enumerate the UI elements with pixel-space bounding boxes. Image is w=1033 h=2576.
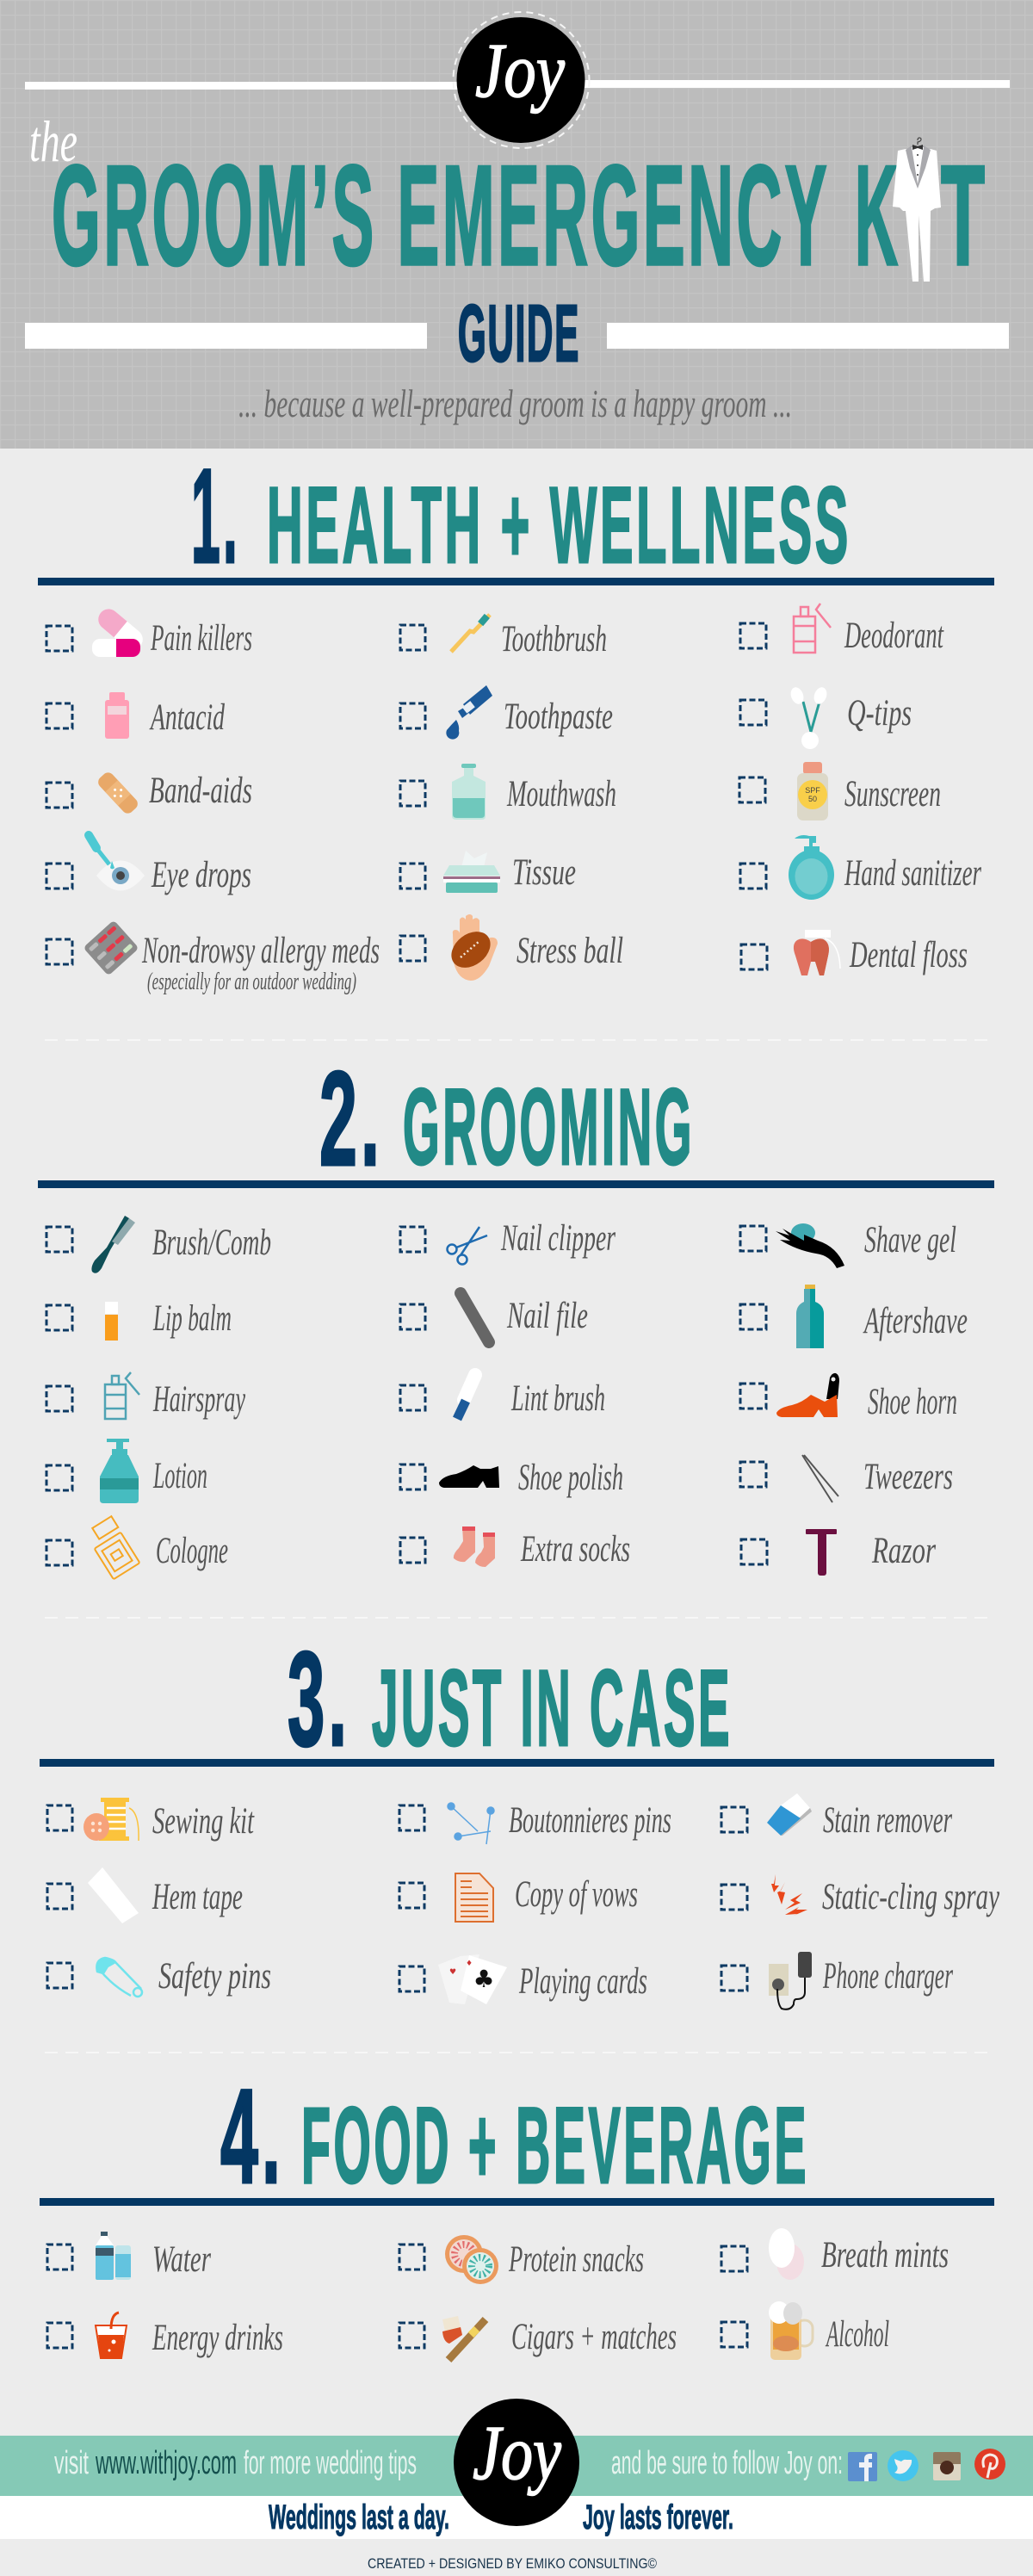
checkbox — [400, 936, 425, 961]
item: Cigars + matches — [399, 2316, 677, 2360]
icon: pins — [448, 1803, 494, 1844]
footer text: visit: visit — [54, 2445, 89, 2481]
item: Lip balm — [46, 1298, 232, 1341]
icon: twitter — [888, 2450, 919, 2481]
heading: Just in Case — [40, 1625, 994, 1774]
checkbox — [46, 1386, 72, 1411]
checkbox — [740, 864, 766, 889]
item: Breath mints — [721, 2228, 949, 2280]
label: Shave gel — [864, 1220, 956, 1260]
item: Toothbrush — [400, 614, 607, 659]
item: Hem tape — [47, 1867, 243, 1923]
dashed separator 2 — [45, 1617, 994, 1619]
tagline: Weddings last a day: Weddings last a day. — [269, 2499, 449, 2536]
icon: playing cards: ♣ — [473, 1965, 495, 1993]
checkbox — [721, 2322, 747, 2347]
checkbox — [740, 1384, 766, 1409]
icon: razor — [806, 1529, 837, 1576]
item: Pain killers — [46, 605, 252, 659]
icon: facebook — [848, 2452, 877, 2481]
dashed separator 1 — [45, 1039, 994, 1041]
icon: cologne bottle — [92, 1516, 139, 1579]
logo: Joy footer badge: Joy — [473, 2411, 561, 2496]
checkbox — [46, 626, 72, 651]
checkbox — [400, 1464, 425, 1489]
heading: Food + Beverage — [40, 2062, 994, 2212]
item: Razor — [741, 1529, 936, 1576]
item: Band-aids — [46, 770, 252, 816]
panel: 4. Food + Beverage — [40, 2062, 994, 2360]
icon: cotton swabs — [789, 685, 829, 749]
item: Extra socks — [400, 1526, 630, 1570]
item: Mouthwash — [400, 764, 616, 820]
icon: hem tape — [88, 1867, 139, 1923]
checkbox — [46, 864, 72, 889]
icon: pills — [92, 605, 147, 657]
checkbox — [46, 1305, 72, 1330]
checkbox — [741, 944, 767, 969]
item: Lint brush — [400, 1375, 605, 1419]
label: Safety pins — [158, 1956, 271, 1997]
label: Protein snacks — [508, 2239, 644, 2280]
checkbox — [400, 1385, 425, 1410]
heading: Food + Beverage: 4. — [220, 2062, 284, 2212]
checkbox — [46, 1227, 72, 1252]
label: Shoe polish — [518, 1458, 623, 1498]
dashed separator 3 — [45, 2052, 994, 2053]
icon: hand with football — [444, 914, 498, 981]
item: Shoe polish — [400, 1458, 623, 1498]
checkbox — [46, 1540, 72, 1565]
item: Stress ball — [400, 914, 623, 981]
checkbox — [46, 1465, 72, 1490]
icon: spool and button — [84, 1798, 139, 1841]
icon: mouthwash bottle — [452, 764, 486, 820]
icon: instagram — [933, 2452, 961, 2480]
item: Q-tips — [740, 685, 912, 749]
icon: lip balm — [105, 1302, 118, 1341]
icon: toothbrush — [451, 614, 490, 652]
checkbox — [740, 700, 766, 725]
item: Shave gel — [740, 1220, 956, 1268]
icon: water bottles — [96, 2232, 131, 2280]
checkbox — [46, 703, 72, 728]
label: Non-drowsy allergy meds — [141, 931, 380, 971]
item: Toothpaste — [400, 685, 613, 740]
heading: Just in Case: 3. — [288, 1625, 350, 1774]
item: Deodorant — [740, 604, 944, 656]
label: Deodorant — [844, 616, 944, 656]
label: Cigars + matches — [511, 2317, 677, 2357]
icon: comb — [91, 1216, 135, 1273]
panel: header — [0, 0, 1033, 449]
icon: eraser — [767, 1793, 812, 1836]
label: Hairspray — [152, 1379, 246, 1420]
icon: pump bottle — [789, 835, 834, 900]
label: Breath mints — [821, 2235, 949, 2276]
checkbox — [740, 1462, 766, 1487]
icon: black shoe — [439, 1465, 499, 1488]
label: Dental floss — [849, 935, 968, 975]
item: Playing cards — [399, 1954, 647, 2004]
checkbox — [740, 1304, 766, 1329]
icon: sunscreen bottle — [797, 762, 828, 820]
checkbox — [399, 2323, 424, 2348]
icon: playing cards — [438, 1954, 507, 2004]
label: Copy of vows — [515, 1874, 638, 1915]
icon: lotion bottle — [100, 1439, 139, 1503]
footer text: visit — [54, 2445, 417, 2481]
footer text: follow: and be sure to follow Joy on: — [611, 2445, 843, 2481]
checkbox — [46, 783, 72, 808]
checkbox — [400, 625, 425, 650]
checkbox — [46, 939, 72, 964]
checkbox — [721, 1966, 747, 1991]
tagline: Joy lasts forever: Joy lasts forever. — [583, 2499, 733, 2536]
title: Groom's Emergency Kit: T — [941, 136, 985, 294]
icon: nail file — [461, 1293, 489, 1342]
label: Shoe horn — [868, 1382, 957, 1422]
item: Safety pins — [47, 1956, 271, 1997]
icon: shoe and horn — [776, 1373, 839, 1417]
item: Lotion — [46, 1439, 207, 1503]
label: Band-aids — [149, 771, 252, 811]
icon: tissue box — [443, 851, 500, 893]
checkbox — [721, 1807, 747, 1832]
label: Pain killers — [150, 618, 252, 659]
item: Antacid — [46, 692, 225, 739]
label: Nail file — [506, 1296, 588, 1336]
label: Lip balm — [152, 1298, 232, 1339]
icon: scissors — [448, 1227, 487, 1264]
item: Phone charger — [721, 1952, 953, 2009]
icon: sunscreen bottle: 50 — [808, 795, 817, 803]
icon: beer mug — [769, 2301, 813, 2360]
label: Tissue — [512, 852, 576, 893]
item: Copy of vows — [399, 1873, 638, 1922]
panel: 3. Just in Case — [40, 1625, 1000, 2009]
icon: blister pack — [83, 920, 139, 975]
checkbox — [400, 1227, 425, 1252]
item: Hairspray — [46, 1372, 246, 1420]
checkbox — [399, 1805, 424, 1830]
item: Tissue — [400, 851, 576, 893]
item: Stain remover — [721, 1793, 952, 1841]
label: Extra socks — [520, 1529, 630, 1570]
item: Energy drinks — [47, 2313, 283, 2358]
icon: pinterest — [974, 2449, 1005, 2480]
checkbox — [400, 703, 425, 728]
icon: socks — [454, 1526, 495, 1567]
checkbox — [47, 1963, 72, 1988]
subtitle: Guide with white bars: GUIDE — [458, 288, 580, 378]
heading: Health + Wellness: 1. — [191, 442, 240, 591]
icon: document — [455, 1873, 493, 1922]
icon: deodorant spray — [794, 604, 831, 653]
label: Alcohol — [825, 2314, 889, 2355]
icon: aftershave bottle — [796, 1285, 824, 1348]
item: Dental floss — [741, 930, 968, 975]
label: Water — [152, 2239, 211, 2280]
label note: (especially for an outdoor wedding) — [147, 968, 356, 995]
item: Boutonnieres pins — [399, 1800, 671, 1844]
label: Toothpaste — [504, 697, 613, 737]
checkbox — [740, 623, 766, 648]
credit: CREATED + DESIGNED BY EMIKO CONSULTING© — [368, 2555, 657, 2572]
logo: Joy badge: Joy — [475, 28, 565, 114]
heading: Grooming: 2. — [319, 1044, 383, 1194]
checkbox — [399, 1966, 424, 1991]
checkbox — [399, 1883, 424, 1908]
icon: playing cards: ♦ — [466, 1960, 473, 1968]
checkbox — [47, 1805, 72, 1830]
label: Boutonnieres pins — [509, 1800, 671, 1841]
checkbox — [739, 777, 765, 802]
item: Shoe horn — [740, 1373, 957, 1422]
icon: hand with gel — [776, 1223, 844, 1268]
panel: footer — [0, 2399, 1033, 2572]
label: Sewing kit — [152, 1801, 255, 1842]
title: the: the — [29, 108, 77, 174]
heading: Grooming — [38, 1044, 994, 1194]
icon: playing cards: ♥ — [449, 1968, 456, 1977]
item: Sunscreen — [739, 762, 941, 820]
item: Sewing kit — [47, 1798, 255, 1842]
item: Protein snacks — [399, 2235, 644, 2284]
checkbox — [47, 2323, 72, 2348]
label: Nail clipper — [500, 1218, 615, 1259]
icon: bottle — [105, 692, 129, 739]
icon: mints — [769, 2228, 804, 2280]
icon: cigar and matches — [442, 2316, 486, 2360]
icon: sunscreen bottle: SPF — [805, 786, 820, 795]
icon: tuxedo as letter I — [893, 138, 941, 282]
label: Aftershave — [863, 1301, 968, 1341]
logo: Joy footer badge — [454, 2399, 579, 2526]
label: Sunscreen — [844, 774, 941, 814]
label: Cologne — [156, 1531, 228, 1571]
label: Stain remover — [823, 1800, 952, 1841]
label: Tweezers — [863, 1457, 953, 1497]
item: Water — [47, 2232, 211, 2280]
checkbox — [47, 2245, 72, 2269]
icon: lint brush — [457, 1375, 475, 1419]
icon: tooth with floss — [794, 930, 840, 975]
item: Nail file — [400, 1293, 588, 1342]
item: Eye drops — [46, 835, 251, 895]
icon: tweezers — [802, 1455, 838, 1502]
item: Nail clipper — [400, 1218, 615, 1264]
label: Mouthwash — [506, 774, 616, 814]
label: Lint brush — [510, 1378, 605, 1419]
icon: hairspray can — [105, 1372, 139, 1419]
icon: cookies — [445, 2235, 498, 2284]
item: Brush/Comb — [46, 1216, 271, 1273]
subtitle: Guide with white bars — [25, 288, 1009, 378]
checkbox — [399, 2245, 424, 2269]
heading: Health + Wellness — [38, 442, 994, 591]
label: Eye drops — [151, 855, 251, 895]
title: Groom's Emergency Kit: K — [855, 136, 898, 294]
footer text: visit: www.withjoy.com — [95, 2445, 237, 2481]
checkbox — [400, 1538, 425, 1563]
label: Brush/Comb — [152, 1223, 271, 1263]
label: Toothbrush — [501, 619, 607, 659]
checkbox — [400, 864, 425, 889]
checkbox — [400, 1304, 425, 1329]
item: Tweezers — [740, 1455, 953, 1502]
icon: eye and dropper — [89, 835, 145, 890]
checkbox — [741, 1539, 767, 1564]
item: Hand sanitizer — [740, 835, 981, 900]
label: Hem tape — [152, 1877, 243, 1917]
icon: toothpaste tube — [446, 685, 492, 740]
label: Antacid — [149, 697, 225, 738]
label: Playing cards — [518, 1961, 647, 2002]
label: Energy drinks — [152, 2318, 283, 2358]
icon: energy drink — [96, 2313, 127, 2358]
item: Alcohol — [721, 2301, 889, 2360]
footer text: visit: for more wedding tips — [244, 2445, 417, 2481]
item: Non-drowsy allergy meds — [46, 920, 380, 995]
label: Stress ball — [516, 931, 623, 971]
checkbox — [721, 1885, 747, 1910]
label: Q-tips — [847, 693, 912, 734]
panel: 1. Health + Wellness — [38, 442, 994, 995]
item: Cologne — [46, 1516, 228, 1579]
item: Aftershave — [740, 1285, 968, 1348]
icon: safety pin — [96, 1958, 142, 1997]
checkbox — [740, 1226, 766, 1251]
label: Lotion — [152, 1456, 207, 1496]
label: Razor — [871, 1531, 936, 1571]
checkbox — [721, 2246, 747, 2271]
icon: static sparks — [771, 1874, 807, 1916]
icon: phone charger — [769, 1952, 812, 2009]
checkbox — [47, 1884, 72, 1909]
item: Static-cling spray — [721, 1874, 1000, 1917]
logo: Joy badge — [453, 12, 589, 148]
checkbox — [400, 781, 425, 806]
panel: 2. Grooming — [38, 1044, 994, 1579]
icon: bandage — [96, 770, 140, 816]
